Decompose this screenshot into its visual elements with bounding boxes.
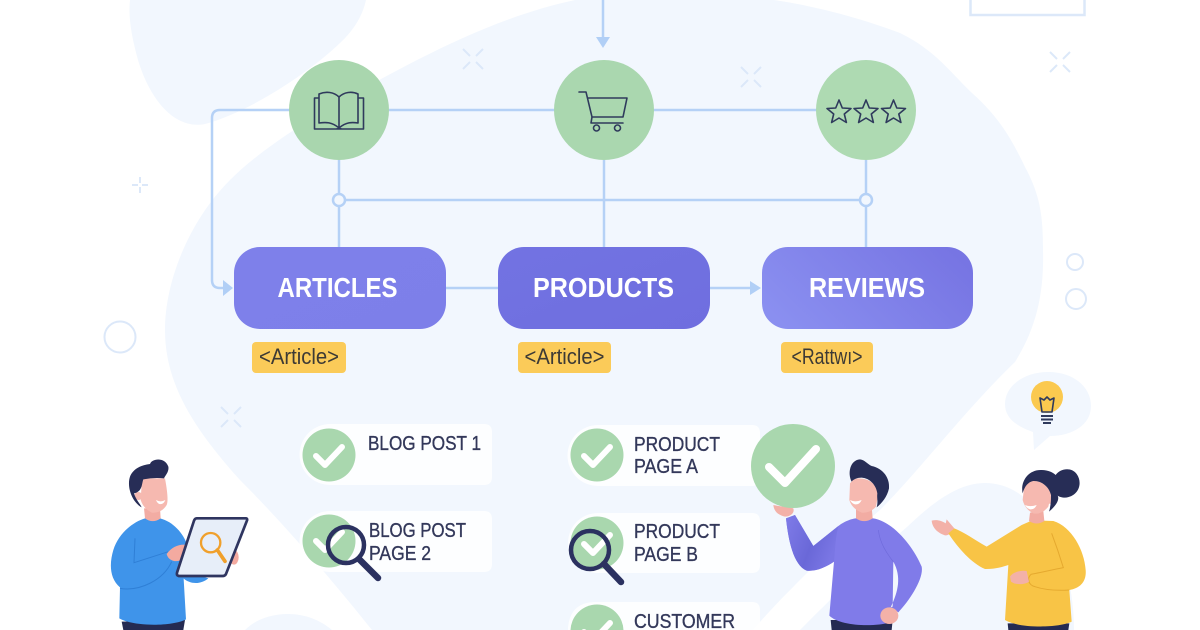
tag: review: <Rattwı>: [792, 344, 862, 369]
person: man with tablet: [111, 459, 247, 630]
pill: products: PRODUCTS: [533, 272, 674, 303]
item: blog post page 2: BLOG POST: [369, 520, 466, 542]
pill: articles: [234, 247, 446, 329]
icon: magnifier 1: [328, 527, 378, 578]
item: blog post page 2: [300, 511, 492, 572]
item: product page b: PRODUCT: [634, 521, 720, 543]
item: product page a: PRODUCT: [634, 434, 720, 456]
item: product page a: PAGE A: [634, 456, 699, 478]
tag: article 1: <Article>: [259, 344, 339, 369]
pill: reviews: REVIEWS: [809, 272, 925, 303]
icon: magnifier 2: [571, 531, 621, 582]
item: blog post 1: [300, 424, 492, 485]
item: product page b: PAGE B: [634, 544, 698, 566]
pill: articles: ARTICLES: [278, 272, 398, 303]
junction nodes: [333, 194, 872, 206]
item: blog post 1: BLOG POST 1: [368, 433, 481, 455]
speech bubble with light bulb: [1005, 372, 1091, 450]
arrowheads: [223, 37, 761, 296]
pill: reviews: [762, 247, 973, 329]
tag: review: [781, 342, 873, 373]
person: woman in yellow: [932, 469, 1086, 630]
item: product page b: [568, 513, 760, 573]
big check badge: [751, 424, 835, 508]
tag: article 2: <Article>: [524, 344, 604, 369]
item: product page a: [567, 425, 760, 486]
top right box: [970, 0, 1084, 15]
person: man in purple: [773, 459, 922, 630]
pill: products: [498, 247, 710, 329]
connector lines: [212, 0, 866, 288]
decorative marks: [104, 49, 1086, 427]
icon: book: [289, 60, 389, 160]
background blobs: [129, 0, 1074, 630]
item: blog post page 2: PAGE 2: [369, 543, 431, 565]
icon: cart: [554, 60, 654, 160]
icon: stars: [816, 60, 916, 160]
item: customer: [568, 602, 760, 630]
